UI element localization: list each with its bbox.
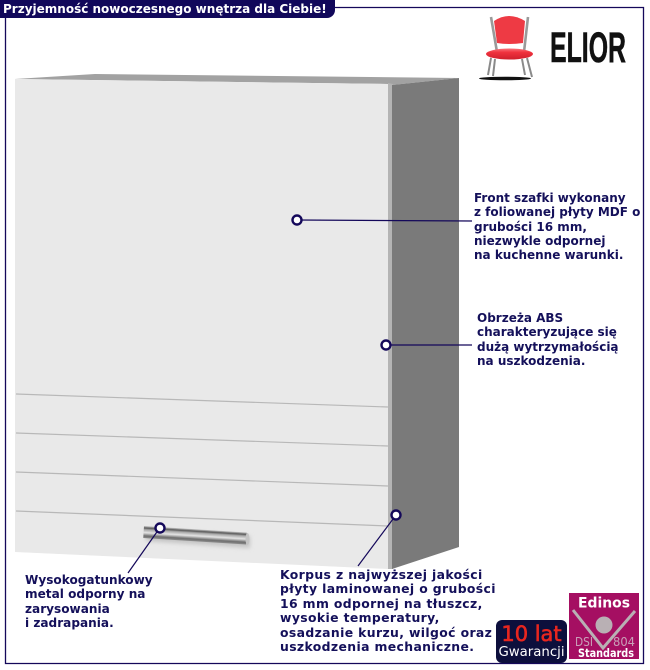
header text: Przyjemność nowoczesnego wnętrza dla Ciebie! [3, 2, 327, 16]
badge number: 10 lat [501, 622, 562, 646]
text: carcass: płyty laminowanej o grubości [280, 581, 496, 596]
text: carcass: Korpus z najwyższej jakości [280, 567, 483, 582]
badge: 10 lat warranty [496, 620, 567, 663]
text: handle [25, 573, 153, 630]
text: front [474, 191, 640, 262]
text: front: na kuchenne warunki. [474, 248, 623, 262]
pointer: handle [128, 524, 164, 573]
header banner [0, 0, 335, 18]
text: ABS edge: dużą wytrzymałością [477, 340, 619, 354]
cabinet side [392, 78, 459, 569]
pointer: ABS edge [382, 340, 472, 350]
badge: Edinos standards: Edinos [578, 596, 630, 612]
cabinet top [15, 74, 459, 85]
front grooves [16, 394, 388, 526]
text: carcass: uszkodzenia mechaniczne. [280, 639, 474, 654]
text: handle: Wysokogatunkowy [25, 573, 153, 587]
text: ABS edge: Obrzeża ABS [477, 311, 563, 325]
pointer: carcass [358, 510, 400, 566]
text: ABS edge [477, 311, 619, 368]
text: front: Front szafki wykonany [474, 191, 626, 205]
cabinet [15, 74, 459, 569]
badge label: Gwarancji [498, 645, 565, 660]
text: carcass: 16 mm odpornej na tłuszcz, [280, 596, 483, 611]
text: ABS edge: charakteryzujące się [477, 325, 617, 339]
text: front: grubości 16 mm, [474, 220, 587, 234]
text: front: niezwykle odpornej [474, 234, 605, 248]
pointer: front [292, 216, 472, 224]
icon: red chair logo [479, 16, 533, 80]
badge: Edinos standards: DSI [575, 634, 593, 649]
text: ABS edge: na uszkodzenia. [477, 354, 585, 368]
text: carcass: wysokie temperatury, [280, 610, 440, 625]
cabinet front [15, 79, 388, 569]
badge: Edinos standards: 804 [613, 634, 635, 649]
cabinet edge [388, 83, 393, 569]
badge: Edinos standards [569, 593, 639, 659]
text: carcass [280, 567, 496, 654]
text: handle: i zadrapania. [25, 616, 114, 630]
text: handle: metal odporny na [25, 587, 145, 601]
text: front: z foliowanej płyty MDF o [474, 205, 640, 219]
handle [143, 526, 250, 548]
text: carcass: osadzanie kurzu, wilgoć oraz [280, 625, 492, 640]
text: handle: zarysowania [25, 602, 110, 616]
